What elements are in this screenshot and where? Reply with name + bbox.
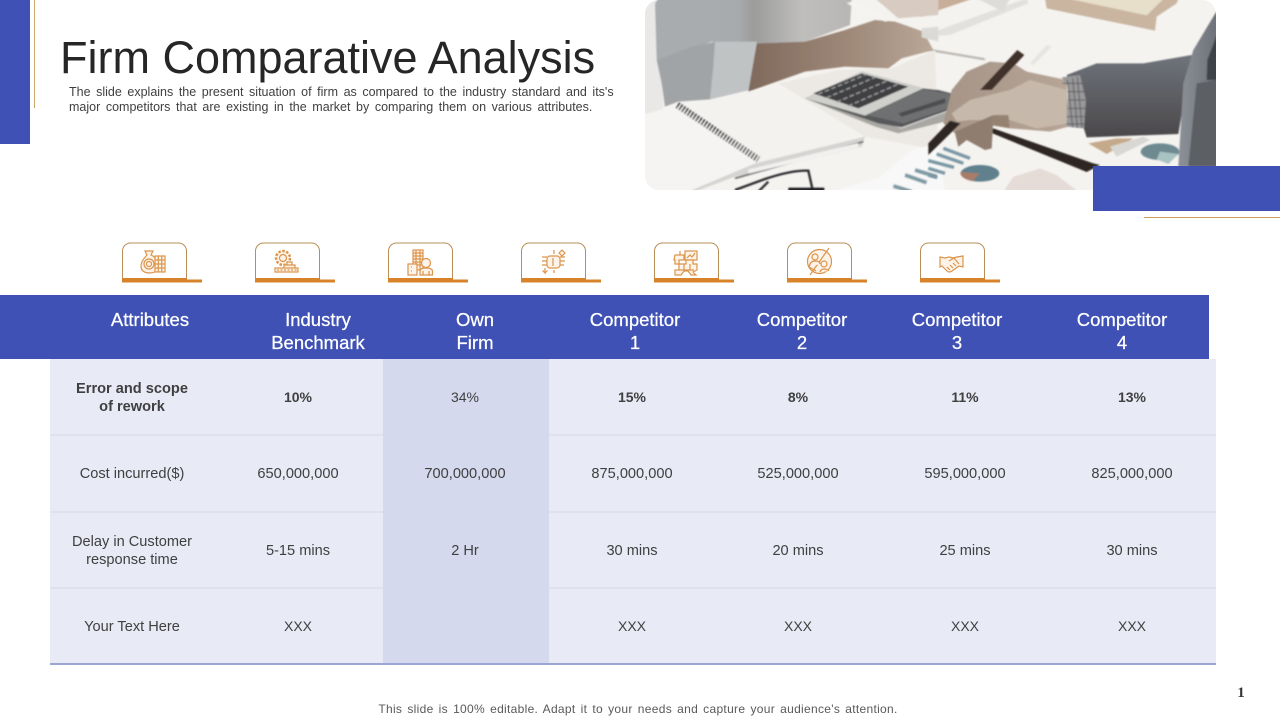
- header: competitor 4: [1077, 309, 1168, 353]
- header: own firm: [456, 309, 494, 353]
- row 2 value: competitor 1: 875,000,000: [591, 466, 673, 482]
- header: competitor 3: 3: [952, 332, 962, 353]
- table header bar: [0, 295, 1209, 359]
- row 2 label: Cost incurred($): [80, 466, 184, 482]
- icon tab: money bag: [122, 242, 202, 282]
- row divider 2: [50, 511, 1216, 513]
- title: Firm Comparative Analysis: [60, 32, 595, 83]
- subtitle text: major competitors that are existing in the market by comparing them on various attributes.: [69, 100, 592, 114]
- icon tab: buildings and person: [388, 242, 468, 282]
- header: competitor 3: Competitor: [912, 309, 1002, 330]
- header: competitor 2: [757, 309, 848, 353]
- row 2 value: own firm: 700,000,000: [424, 466, 506, 482]
- header: competitor 2: Competitor: [757, 309, 847, 330]
- row 4 value: competitor 4: XXX: [1118, 618, 1146, 634]
- left half of photo: [643, 0, 978, 192]
- row 1 label: of rework: [99, 399, 165, 415]
- row 3 value: benchmark: 5-15 mins: [266, 543, 330, 559]
- header: own firm: Firm: [457, 332, 493, 353]
- icon tab: handshake: [920, 242, 1000, 282]
- row divider 1: [50, 434, 1216, 436]
- icon tab: map and chart: [654, 242, 734, 282]
- row 3 value: competitor 3: 25 mins: [939, 543, 991, 559]
- row divider 3: [50, 587, 1216, 589]
- thin gold vertical line: [34, 0, 35, 108]
- icon tab: no discrimination circle: [787, 242, 867, 282]
- row 1 label: [76, 381, 188, 415]
- header: competitor 2: 2: [797, 332, 807, 353]
- row 4 value: competitor 1: XXX: [618, 618, 646, 634]
- row 1 value: competitor 1: 15%: [618, 389, 646, 405]
- header: own firm: Own: [456, 309, 494, 330]
- row 2 value: benchmark: 650,000,000: [257, 466, 339, 482]
- header: competitor 1: [590, 309, 680, 353]
- row 2 value: competitor 3: 595,000,000: [924, 466, 1006, 482]
- row 3 label: Delay in Customer: [72, 534, 192, 550]
- row 4 value: competitor 2: XXX: [784, 618, 812, 634]
- row 1 value: benchmark: 10%: [284, 389, 312, 405]
- header: industry benchmark: Industry: [285, 309, 351, 330]
- table body background: [50, 359, 1216, 664]
- row 2 value: competitor 4: 825,000,000: [1091, 466, 1173, 482]
- page number: 1: [1237, 685, 1245, 701]
- right half of photo, foreground items: [928, 10, 1217, 192]
- photo: hands with calculator and charts: [645, 0, 1216, 190]
- row 4 value: benchmark: XXX: [284, 618, 312, 634]
- header: competitor 4: 4: [1117, 332, 1127, 353]
- row 2 value: competitor 2: 525,000,000: [757, 466, 839, 482]
- icon tab: gear and gold bars: [255, 242, 335, 282]
- table: [0, 295, 1216, 665]
- row 4 value: competitor 3: XXX: [951, 618, 979, 634]
- row 1 value: competitor 4: 13%: [1118, 389, 1146, 405]
- blue accent block: [1093, 166, 1280, 211]
- row 1 value: own firm: 34%: [451, 389, 479, 405]
- subtitle text: The slide explains the present situation of firm as compared to the industry standard and its's: [69, 84, 614, 98]
- header: competitor 4: Competitor: [1077, 309, 1167, 330]
- footer note: This slide is 100% editable. Adapt it to your needs and capture your audience's attention.: [378, 702, 898, 716]
- thin gold horizontal line: [1144, 217, 1280, 218]
- row 3 label: response time: [86, 552, 178, 568]
- row 1 label: Error and scope: [76, 381, 188, 397]
- header: attributes: Attributes: [111, 309, 189, 330]
- row 3 value: competitor 2: 20 mins: [772, 543, 824, 559]
- header: competitor 1: 1: [630, 332, 640, 353]
- subtitle text: [69, 84, 614, 114]
- left accent bar: [0, 0, 30, 144]
- table bottom rule: [50, 663, 1216, 665]
- row 3 value: competitor 1: 30 mins: [606, 543, 658, 559]
- row 3 label: [72, 534, 192, 568]
- highlighted own firm column: [383, 359, 549, 664]
- right half of photo, background items: [920, 0, 1178, 65]
- row 3 value: own firm: 2 Hr: [451, 543, 479, 559]
- row 3 value: competitor 4: 30 mins: [1106, 543, 1158, 559]
- row 1 value: competitor 3: 11%: [951, 389, 979, 405]
- header: industry benchmark: [271, 309, 365, 353]
- row 1 value: competitor 2: 8%: [788, 389, 808, 405]
- header: competitor 1: Competitor: [590, 309, 680, 330]
- row 4 label: Your Text Here: [84, 618, 180, 634]
- header: industry benchmark: Benchmark: [271, 332, 365, 353]
- header: competitor 3: [912, 309, 1002, 353]
- icon tab: hands exchanging: [521, 242, 601, 282]
